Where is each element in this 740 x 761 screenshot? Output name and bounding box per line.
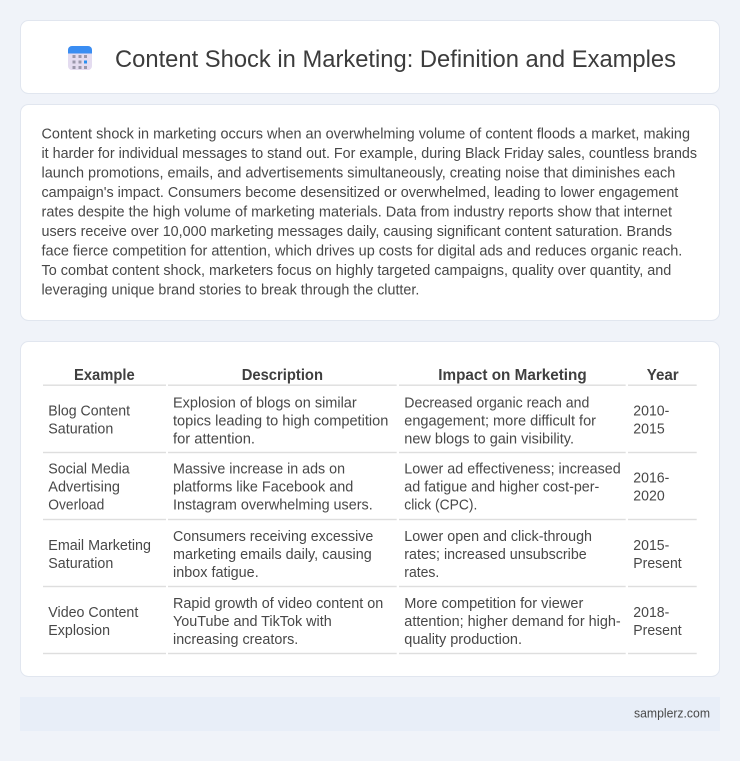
table header row: Example (74, 367, 135, 384)
text block: definition paragraph: Content shock in marketing occurs when an overwhelming volume of content floods a market, making (42, 126, 690, 142)
text block: definition paragraph: campaign's impact. Consumers become desensitized or overwhelmed, leading to lower engagement (42, 185, 678, 201)
table row: video content explosion: attention; higher demand for high- (404, 614, 621, 630)
table row: email marketing saturation: Present (633, 556, 682, 572)
table row: social media advertising overload: ad fatigue and higher cost-per- (404, 480, 600, 496)
table row: video content explosion: YouTube and TikTok with (173, 614, 332, 630)
table row: video content explosion: Present (633, 623, 682, 639)
table row: email marketing saturation: rates. (404, 565, 439, 581)
table row: email marketing saturation: inbox fatigue. (173, 565, 259, 581)
table header row (74, 367, 679, 384)
table row: blog content saturation: engagement; more difficult for (404, 413, 596, 429)
table row: video content explosion: 2018- (633, 605, 669, 621)
panel: examples table (20, 342, 720, 676)
table row: email marketing saturation: Email Marketing (48, 538, 151, 554)
table row: email marketing saturation: marketing emails daily, causing (173, 547, 372, 563)
table row: video content explosion: Rapid growth of video content on (173, 596, 383, 612)
table row: email marketing saturation (48, 529, 682, 581)
table row: social media advertising overload: 2016- (633, 471, 669, 487)
table row: social media advertising overload: Lower ad effectiveness; increased (404, 462, 621, 478)
table row: social media advertising overload: platforms like Facebook and (173, 480, 353, 496)
table row: social media advertising overload: Overload (48, 498, 104, 514)
table row: email marketing saturation: Saturation (48, 556, 113, 572)
table row: video content explosion: Explosion (48, 623, 110, 639)
table row: blog content saturation: topics leading to high competition (173, 413, 388, 429)
table row: email marketing saturation: 2015- (633, 538, 669, 554)
text block: definition paragraph: launch promotions, emails, and advertisements simultaneously, creating noise that diminishes each (42, 165, 675, 181)
table row: blog content saturation: 2015 (633, 421, 665, 437)
table row: social media advertising overload (48, 462, 669, 514)
text block: definition paragraph: users receive over 10,000 marketing messages daily, causing significant content saturation. Brands (42, 224, 672, 240)
table row: social media advertising overload: click (CPC). (404, 498, 477, 514)
table row: blog content saturation: Blog Content (48, 403, 130, 419)
table row: blog content saturation: 2010- (633, 403, 669, 419)
panel: header (20, 20, 720, 94)
table row: email marketing saturation: rates; increased unsubscribe (404, 547, 587, 563)
text block: definition paragraph: rates despite the high volume of marketing materials. Data from industry reports show that internet (42, 204, 672, 220)
table row: blog content saturation: new blogs to gain visibility. (404, 431, 574, 447)
table row: social media advertising overload: Social Media (48, 462, 130, 478)
table row: video content explosion: More competition for viewer (404, 596, 584, 612)
table row: blog content saturation: for attention. (173, 431, 255, 447)
panel: intro text (20, 104, 720, 320)
table row: social media advertising overload: Massive increase in ads on (173, 462, 345, 478)
text block: definition paragraph: leveraging unique brand stories to break through the clutter. (42, 282, 419, 298)
table row: social media advertising overload: 2020 (633, 489, 665, 505)
icon: calendar (68, 46, 92, 70)
table row: blog content saturation (48, 395, 669, 447)
text block: definition paragraph: To combat content shock, marketers focus on highly targeted campaigns, quality over quantity, and (42, 263, 671, 279)
table row: blog content saturation: Decreased organic reach and (404, 395, 589, 411)
table row: social media advertising overload: Instagram overwhelming users. (173, 498, 373, 514)
table row: video content explosion: Video Content (48, 605, 138, 621)
table row: video content explosion: increasing creators. (173, 632, 298, 648)
table header row: Impact on Marketing (438, 367, 587, 384)
footer source label: samplerz.com (634, 707, 710, 721)
footer (20, 697, 720, 731)
table row: email marketing saturation: Lower open and click-through (404, 529, 592, 545)
table row: email marketing saturation: Consumers receiving excessive (173, 529, 373, 545)
table header row: Description (242, 367, 323, 384)
text block: definition paragraph: it harder for individual messages to stand out. For example, during Black Friday sales, countless brands (42, 146, 697, 162)
table row: video content explosion: quality production. (404, 632, 522, 648)
table row: video content explosion (48, 596, 682, 648)
text block: definition paragraph: face fierce competition for attention, which drives up costs for digital ads and reduces organic reach. (42, 243, 682, 259)
table row: social media advertising overload: Advertising (48, 480, 120, 496)
text block: definition paragraph (42, 126, 697, 298)
title: Content Shock in Marketing: Definition and Examples (115, 46, 676, 73)
table row: blog content saturation: Explosion of blogs on similar (173, 395, 357, 411)
table header row: Year (647, 367, 679, 384)
table row: blog content saturation: Saturation (48, 421, 113, 437)
